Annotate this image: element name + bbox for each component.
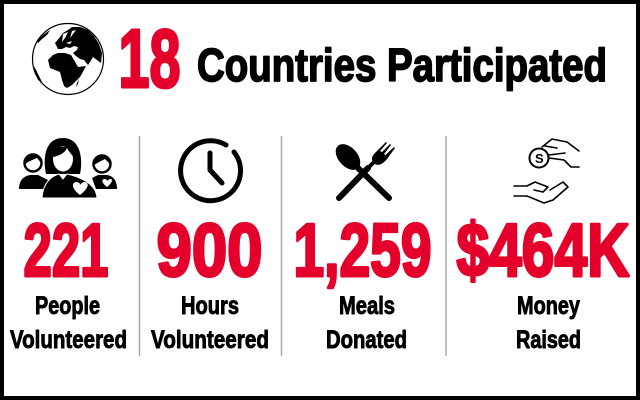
icon: spoon and fork [331, 139, 395, 198]
label: Money: Money [517, 292, 580, 320]
icon: hands and coin [514, 139, 579, 203]
column: hours volunteered [151, 141, 269, 354]
icon: clock [181, 141, 241, 201]
label: Meals: Meals [339, 292, 395, 320]
label: Raised: Raised [516, 326, 581, 354]
label: Volunteered: Volunteered [151, 326, 269, 354]
value: 900: 900 [156, 208, 262, 292]
big number: 18: 18 [118, 12, 180, 105]
column: people volunteered [10, 138, 127, 354]
value: 221: 221 [24, 208, 108, 292]
label: Volunteered: Volunteered [10, 326, 127, 354]
column: money raised [456, 139, 630, 354]
icon: volunteers [19, 138, 117, 198]
icon: hands and coin: S [535, 151, 544, 166]
icon: globe [32, 24, 104, 94]
label: People: People [35, 292, 100, 320]
label: Donated: Donated [326, 326, 407, 354]
column: meals donated [294, 139, 432, 354]
label: Hours: Hours [181, 292, 239, 320]
value: 1,259: 1,259 [294, 208, 432, 292]
